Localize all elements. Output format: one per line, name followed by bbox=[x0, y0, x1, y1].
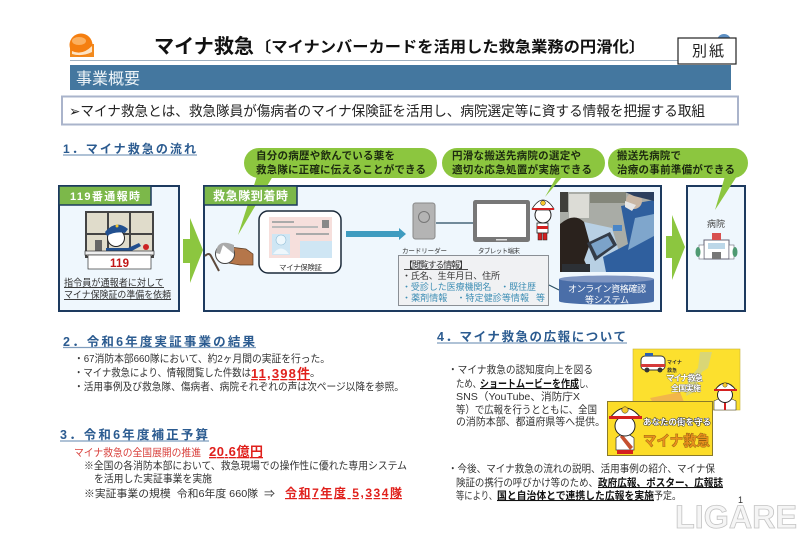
info box: viewable information: 【閲覧する情報】 bbox=[404, 259, 468, 270]
icon: insurance card bbox=[259, 211, 341, 273]
section 2: demonstration results bbox=[63, 334, 404, 393]
callout: crew: 適切な応急処置が実施できる bbox=[452, 163, 592, 176]
bullets: section 2: 11,398件 bbox=[251, 366, 310, 381]
info box: viewable information: ・薬剤情報 ・特定健診等情報 bbox=[402, 292, 529, 303]
blue blob behind annex tag bbox=[717, 34, 731, 48]
info box: viewable information: 等 bbox=[536, 292, 545, 303]
heading: section 1: 1．マイナ救急の流れ bbox=[63, 141, 196, 156]
icon: rescue worker bbox=[532, 200, 554, 240]
icon: tablet bbox=[473, 200, 530, 255]
icon: dispatcher at desk: 119 bbox=[110, 258, 129, 270]
text: publicity plan: 等により、 bbox=[456, 489, 497, 502]
text: short movie: ため、 bbox=[456, 378, 481, 390]
panel: ambulance arrival bbox=[204, 186, 661, 311]
text: short movie: の消防本部、都道府県等へ提供。 bbox=[456, 415, 605, 428]
callout: patient: 救急隊に正確に伝えることができる bbox=[256, 163, 426, 176]
title: 〔マイナンバーカードを活用した救急業務の円滑化〕 bbox=[255, 38, 645, 56]
text: short movie bbox=[448, 363, 605, 428]
icon: card reader: カードリーダー bbox=[402, 246, 447, 255]
summary box: ➢マイナ救急とは、救急隊員が傷病者のマイナ保険証を活用し、病院選定等に資する情報を把握する取組 bbox=[69, 103, 705, 119]
image: protect your town banner bbox=[608, 402, 712, 456]
label: 119 call: 119番通報時 bbox=[70, 189, 140, 203]
icon: collapsed elderly patient bbox=[205, 243, 253, 271]
heading: section 3: 3．令和6年度補正予算 bbox=[60, 427, 208, 442]
icon: hospital building bbox=[696, 233, 738, 259]
info box: viewable information: ・氏名、生年月日、住所 bbox=[402, 270, 500, 281]
image: protect your town banner: あなたの街を守る bbox=[643, 417, 711, 427]
callout: crew: 円滑な搬送先病院の選定や bbox=[452, 149, 581, 162]
photo: paramedic using tablet bbox=[560, 192, 654, 272]
callout: hospital bbox=[608, 148, 748, 210]
arrow: to hospital bbox=[666, 215, 685, 280]
heading: section 4: 4．マイナ救急の広報について bbox=[437, 329, 626, 344]
bullets: section 2 bbox=[74, 352, 404, 393]
label: arrival: 救急隊到着時 bbox=[213, 188, 288, 203]
page number: 1 bbox=[738, 495, 743, 505]
panel: 119 call bbox=[59, 186, 179, 311]
text: publicity plan: 予定。 bbox=[654, 490, 681, 502]
arrow: card to reader bbox=[346, 228, 406, 240]
budget details: 令和7年度 5,334隊 bbox=[285, 485, 402, 500]
caption: dispatcher: 指令員が通報者に対して bbox=[64, 277, 164, 289]
caption: dispatcher bbox=[64, 277, 171, 301]
image: nationwide rollout banner: マイナ救急 bbox=[666, 373, 703, 383]
callout: hospital: 搬送先病院で bbox=[617, 149, 681, 162]
text: publicity plan: 国と自治体とで連携した広報を実施 bbox=[497, 489, 654, 502]
icon: tablet: タブレット端末 bbox=[478, 246, 520, 255]
text: publicity plan: ・今後、マイナ救急の流れの説明、活用事例の紹介、マイナ保 bbox=[448, 462, 715, 475]
budget details: を活用した実証事業を実施 bbox=[94, 472, 212, 485]
budget details bbox=[74, 444, 407, 500]
image: nationwide rollout banner: 全国実施 bbox=[671, 383, 701, 393]
text: publicity plan: 政府広報、ポスター、広報誌 bbox=[598, 476, 723, 489]
text: short movie: 等）で広報を行うとともに、全国 bbox=[456, 403, 597, 416]
image: nationwide rollout banner: 救急 bbox=[667, 367, 677, 374]
text: publicity plan bbox=[448, 462, 723, 502]
budget details: マイナ救急の全国展開の推進 bbox=[74, 446, 201, 459]
header bar: overview: 事業概要 bbox=[76, 70, 140, 88]
bullets: section 2: ・67消防本部660隊において、約2ヶ月間の実証を行った。 bbox=[74, 352, 330, 365]
info box: viewable information bbox=[398, 256, 548, 306]
icon: orange logo bbox=[70, 34, 94, 57]
heading: section 2: 2．令和6年度実証事業の結果 bbox=[63, 334, 255, 349]
arrow: to arrival bbox=[183, 218, 203, 283]
summary box bbox=[62, 96, 738, 124]
image: nationwide rollout banner bbox=[633, 349, 740, 410]
bullets: section 2: 。 bbox=[310, 367, 320, 379]
callout: patient bbox=[238, 148, 437, 235]
budget details: 20.6億円 bbox=[209, 444, 263, 459]
image: nationwide rollout banner: マイナ bbox=[667, 360, 682, 366]
callout: hospital: 治療の事前準備ができる bbox=[617, 163, 735, 176]
icon: insurance card: マイナ保険証 bbox=[279, 263, 322, 272]
text: short movie: SNS（YouTube、消防庁X bbox=[456, 390, 580, 403]
budget details: ※全国の各消防本部において、救急現場での操作性に優れた専用システム bbox=[84, 459, 407, 472]
annex tag bbox=[678, 38, 736, 64]
title bbox=[70, 35, 680, 60]
callout: crew bbox=[442, 148, 605, 197]
text: short movie: し、 bbox=[579, 378, 592, 390]
panel: hospital: 病院 bbox=[707, 219, 725, 229]
image: protect your town banner: マイナ救急 bbox=[643, 432, 710, 450]
text: publicity plan: 険証の携行の呼びかけ等のため、 bbox=[456, 476, 598, 489]
panel: hospital bbox=[687, 186, 745, 311]
text: short movie: ショートムービーを作成 bbox=[480, 377, 579, 390]
bullets: section 2: ・活用事例及び救急隊、傷病者、病院それぞれの声は次ページ以降を参照。 bbox=[74, 380, 404, 393]
title: マイナ救急 bbox=[154, 35, 254, 58]
header bar: overview bbox=[70, 65, 731, 90]
callout: patient: 自分の病歴や飲んでいる薬を bbox=[256, 149, 395, 162]
budget details: ※実証事業の規模 令和6年度 660隊 ⇒ bbox=[84, 487, 276, 500]
section 4: publicity bbox=[437, 329, 740, 502]
section 3: supplementary budget bbox=[60, 427, 407, 500]
cylinder: online eligibility system: オンライン資格確認 bbox=[568, 283, 646, 294]
annex tag: 別紙 bbox=[692, 43, 724, 60]
cylinder: online eligibility system: 等システム bbox=[585, 294, 629, 305]
bullets: section 2: ・マイナ救急により、情報閲覧した件数は bbox=[74, 366, 251, 379]
label: arrival bbox=[204, 186, 297, 205]
cylinder: online eligibility system bbox=[559, 276, 654, 305]
caption: dispatcher: マイナ保険証の準備を依頼 bbox=[64, 289, 171, 301]
icon: card reader bbox=[402, 203, 447, 255]
text: short movie: ・マイナ救急の認知度向上を図る bbox=[448, 363, 593, 376]
info box: viewable information: ・受診した医療機関名 ・既往歴 bbox=[402, 281, 536, 292]
